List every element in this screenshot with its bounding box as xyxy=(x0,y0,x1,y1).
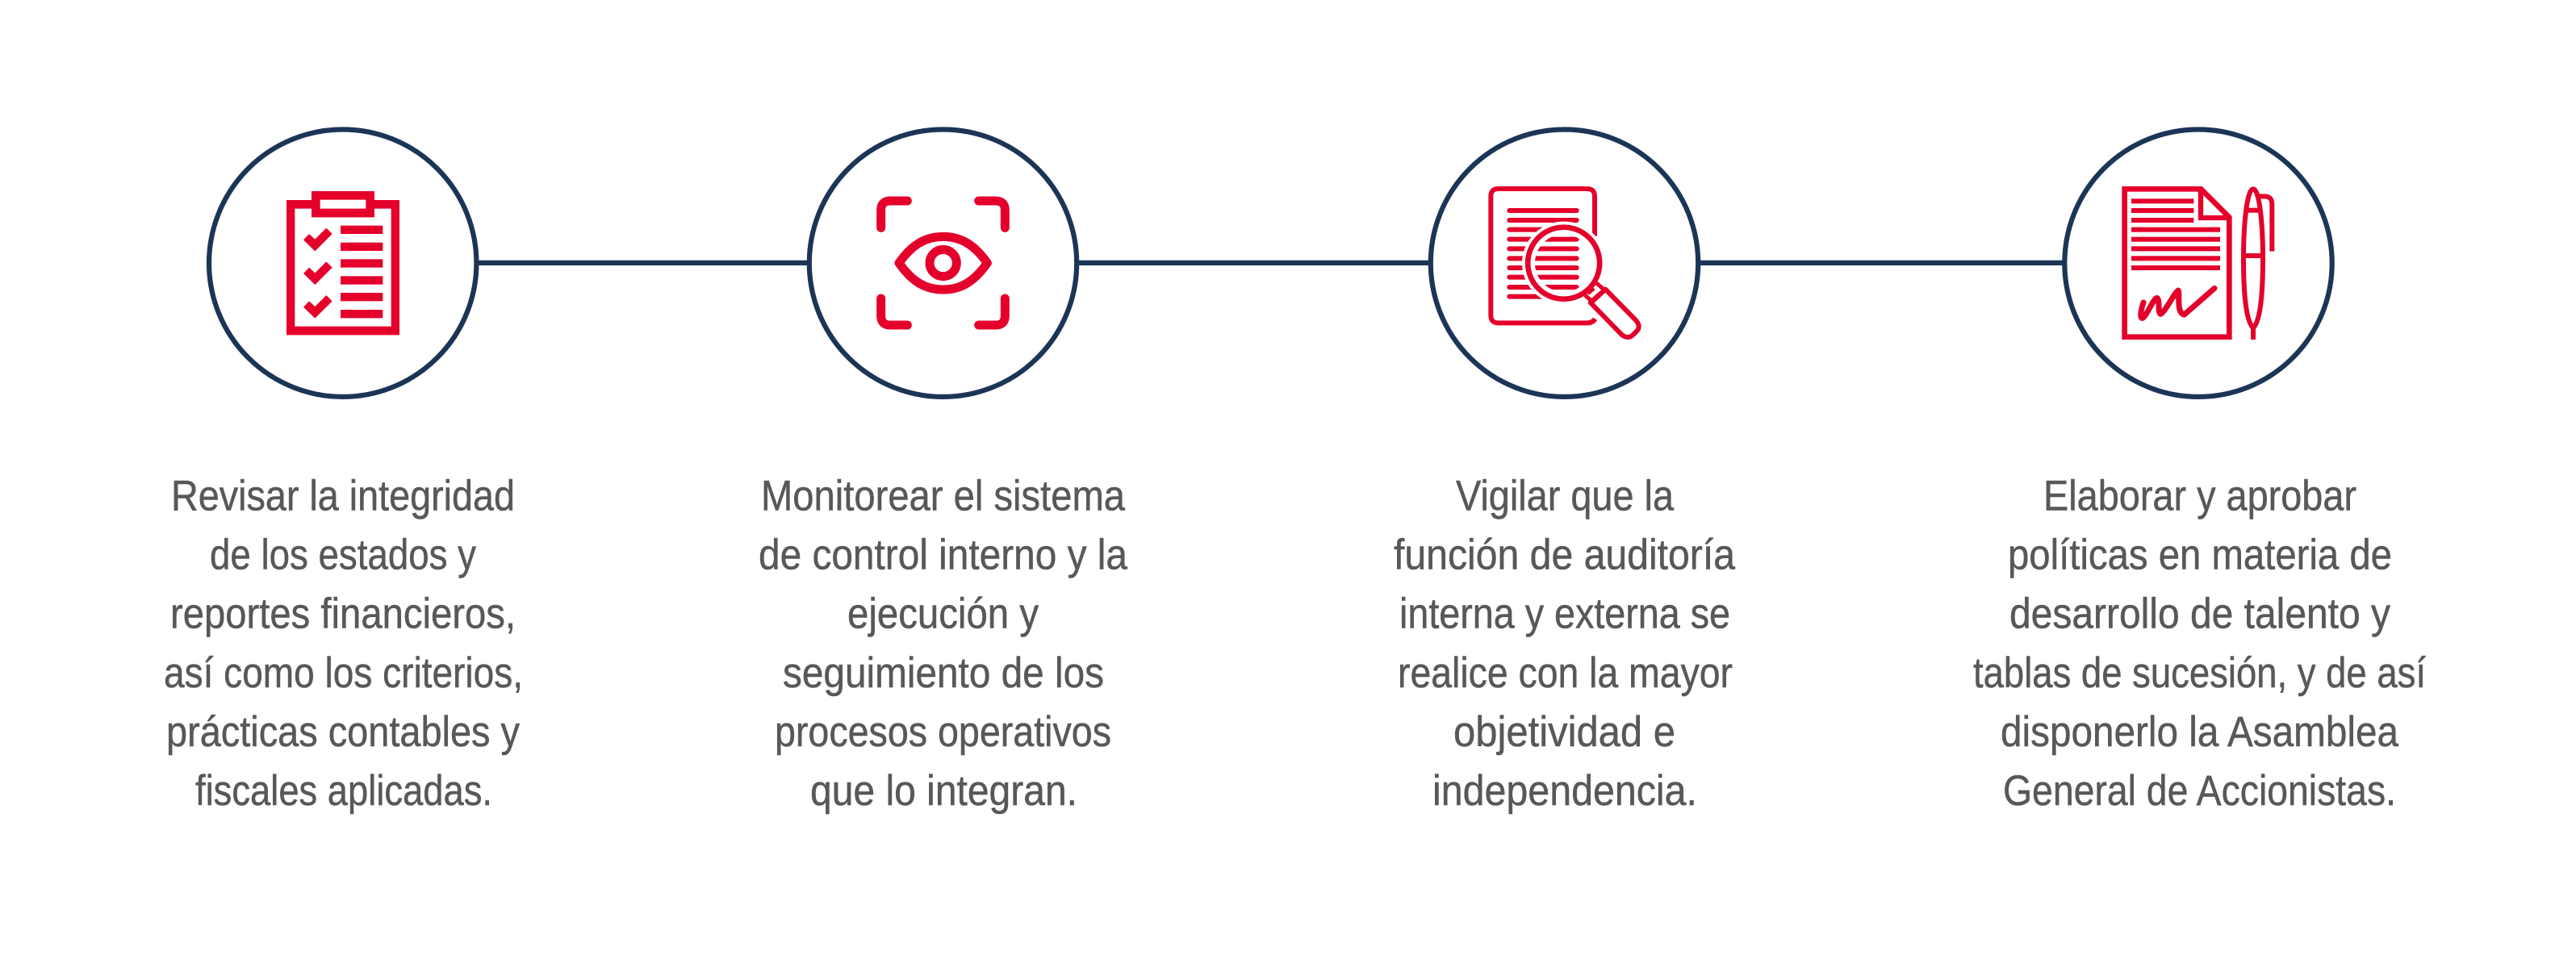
icon: signed document and pen xyxy=(2125,189,2272,340)
text: step 2 description: que lo integran. xyxy=(810,767,1077,815)
text: step 1 description: prácticas contables y xyxy=(166,708,520,756)
text: step 4 description xyxy=(1973,473,2426,815)
connector line: step 3 to step 4 xyxy=(1699,261,2064,265)
text: step 3 description: objetividad e xyxy=(1453,708,1675,756)
text: step 2 description: Monitorear el sistema xyxy=(761,473,1125,519)
text: step 3 description: Vigilar que la xyxy=(1456,473,1674,519)
icon: eye in focus frame xyxy=(881,201,1005,325)
circle: step 1 xyxy=(209,130,476,397)
panel: step 4 policies xyxy=(1973,130,2426,815)
text: step 4 description: desarrollo de talento y xyxy=(2009,590,2390,638)
text: step 2 description xyxy=(759,473,1127,815)
text: step 1 description: de los estados y xyxy=(210,532,476,579)
text: step 4 description: Elaborar y aprobar xyxy=(2043,473,2356,519)
text: step 4 description: disponerlo la Asamblea xyxy=(2001,708,2398,756)
text: step 3 description xyxy=(1394,473,1735,815)
text: step 3 description: función de auditoría xyxy=(1394,532,1735,579)
icon: document with magnifying glass xyxy=(1491,189,1639,337)
panel: step 2 monitor xyxy=(759,130,1127,815)
text: step 4 description: General de Accionistas. xyxy=(2003,767,2396,815)
text: step 1 description xyxy=(164,473,523,815)
text: step 3 description: realice con la mayor xyxy=(1398,649,1733,697)
text: step 1 description: Revisar la integridad xyxy=(171,473,515,519)
text: step 4 description: tablas de sucesión, y de así xyxy=(1973,649,2426,697)
text: step 3 description: interna y externa se xyxy=(1399,590,1730,638)
text: step 1 description: reportes financieros, xyxy=(170,590,516,638)
panel: step 1 review xyxy=(164,130,523,815)
text: step 2 description: de control interno y la xyxy=(759,532,1127,579)
circle: step 4 xyxy=(2064,130,2332,397)
circle: step 3 xyxy=(1431,130,1698,397)
text: step 1 description: fiscales aplicadas. xyxy=(195,767,492,815)
icon: clipboard checklist xyxy=(286,191,399,335)
connector line: step 2 to step 3 xyxy=(1077,261,1430,265)
text: step 4 description: políticas en materia de xyxy=(2008,532,2392,579)
text: step 2 description: procesos operativos xyxy=(775,708,1111,756)
text: step 1 description: así como los criterios, xyxy=(164,649,523,697)
circle: step 2 xyxy=(809,130,1077,397)
connector line: step 1 to step 2 xyxy=(476,261,809,265)
text: step 2 description: ejecución y xyxy=(847,590,1039,638)
panel: step 3 oversee xyxy=(1394,130,1735,815)
text: step 2 description: seguimiento de los xyxy=(783,649,1104,697)
text: step 3 description: independencia. xyxy=(1432,767,1697,815)
